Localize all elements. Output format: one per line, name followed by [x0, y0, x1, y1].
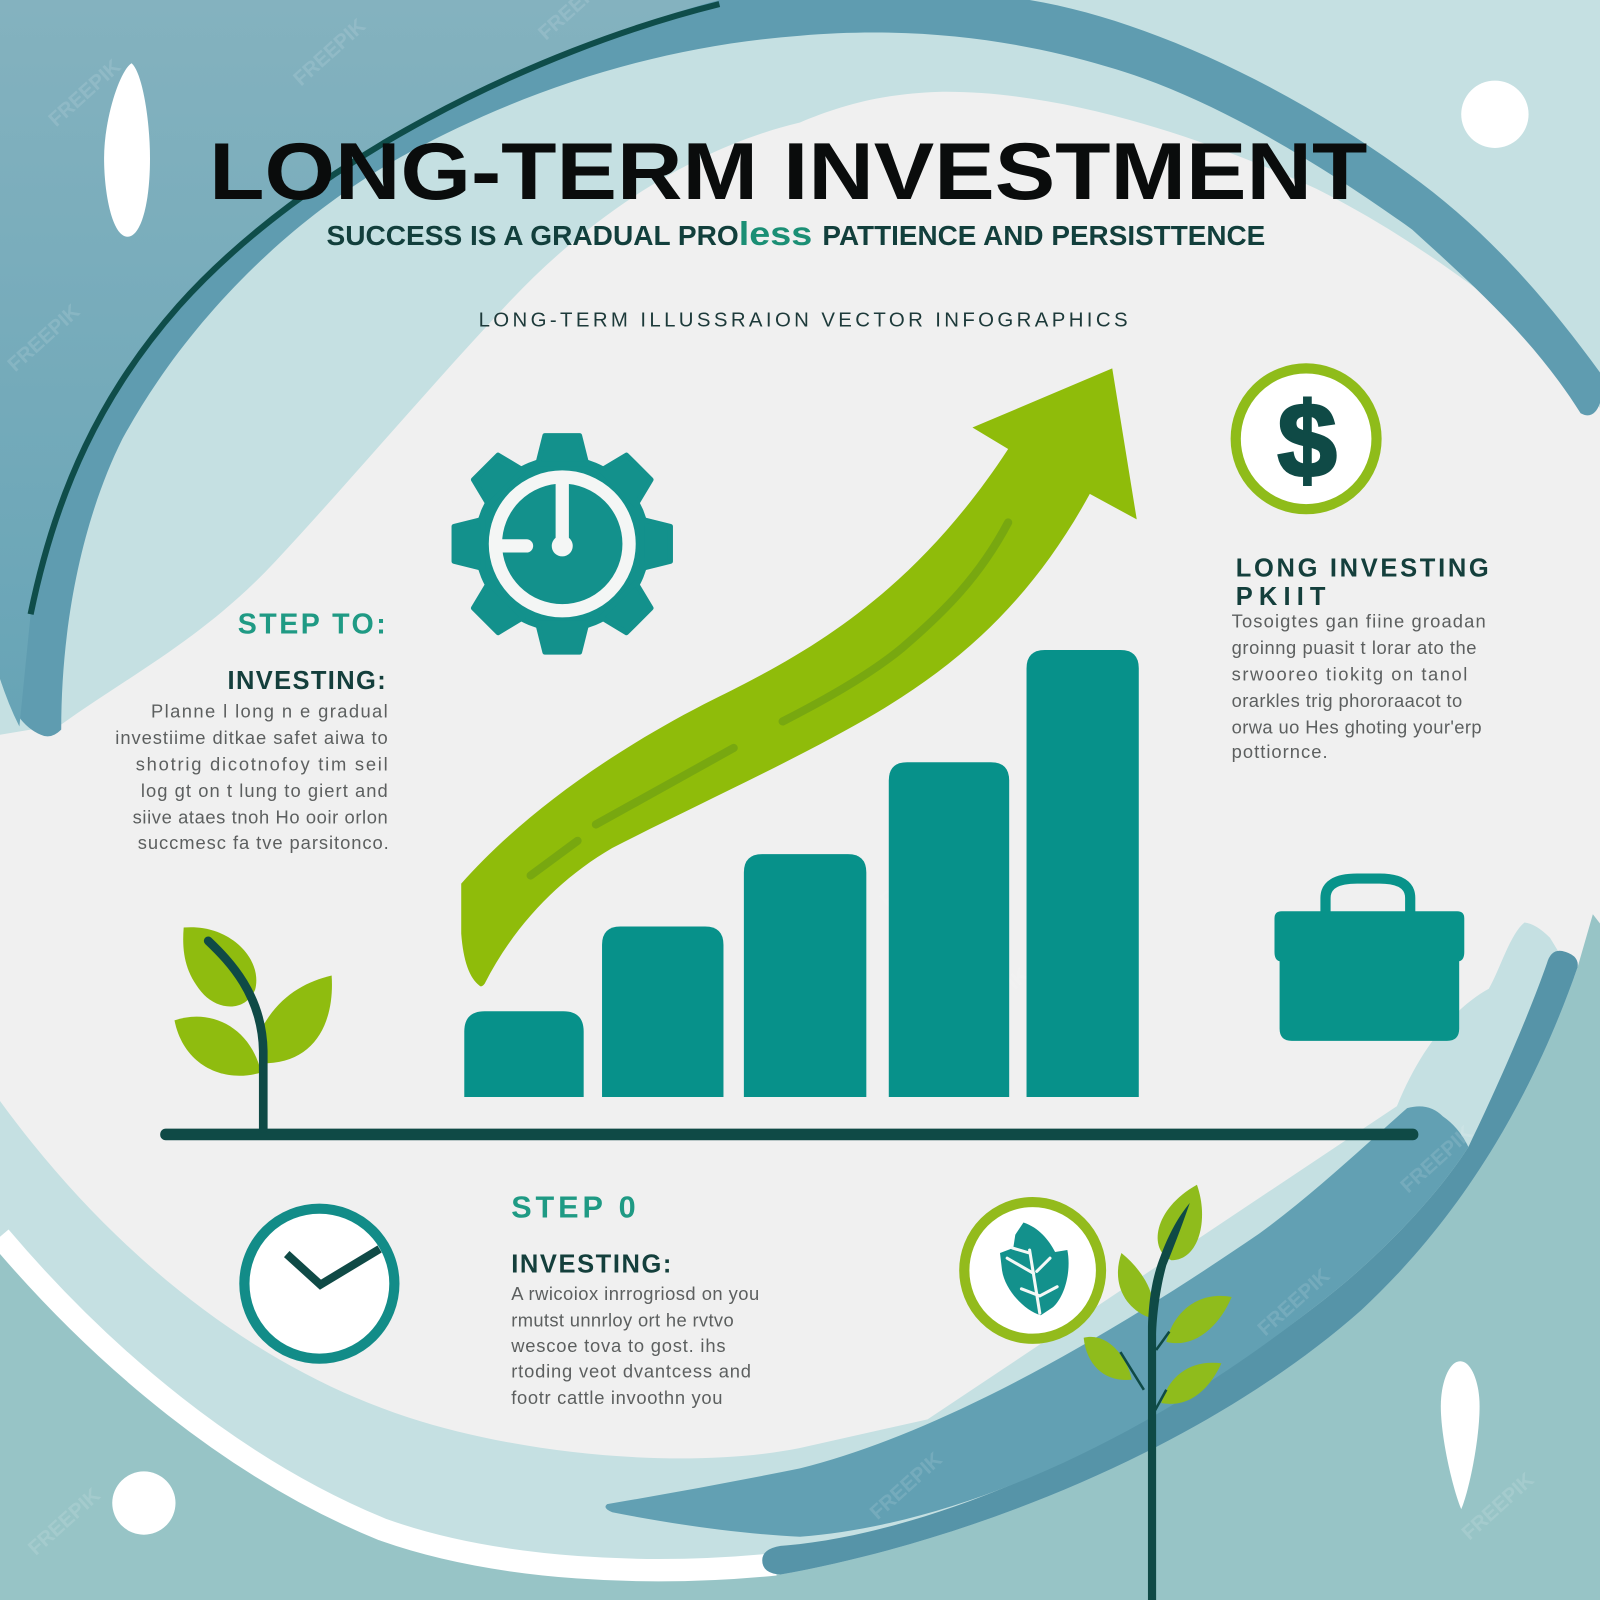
icon: briefcase [1274, 879, 1464, 1041]
watermarks: FREEPIK [1254, 1265, 1335, 1340]
icon: gear clock [454, 436, 670, 652]
text block: long investing profit: PKIIT [1236, 583, 1326, 611]
text block: step 0: A rwicoiox inrrogriosd on you [511, 1283, 759, 1304]
arrow centre dashes [531, 522, 1008, 876]
text block: step 0 [510, 1190, 759, 1408]
bar chart [464, 650, 1139, 1097]
watermarks: FREEPIK [1458, 1469, 1539, 1545]
text block: step 0: footr cattle invoothn you [511, 1387, 722, 1408]
text block: step to: INVESTING: [228, 667, 386, 695]
text block: long investing profit: Tosoigtes gan fiine groadan [1232, 611, 1486, 632]
icon: clock [244, 1209, 394, 1359]
text block: step to: succmesc fa tve parsitonco. [138, 832, 389, 853]
text block: step to: STEP TO: [238, 609, 386, 641]
subtitle: SUCCESS IS A GRADUAL PRO [327, 220, 739, 251]
text block: long investing profit: groinng puasit t lorar ato the [1232, 637, 1477, 658]
text block: step to: shotrig dicotnofoy tim seil [136, 753, 388, 774]
text block: long investing profit: pottiornce. [1232, 741, 1328, 762]
watermarks: FREEPIK [953, 964, 1034, 1039]
icon: leaf badge [964, 1202, 1101, 1339]
icon: tall plant [1084, 1185, 1232, 1600]
watermarks: FREEPIK [45, 56, 125, 131]
caption: LONG-TERM ILLUSSRAION VECTOR INFOGRAPHICS [479, 310, 1128, 332]
subtitle [327, 216, 1265, 253]
text block: step 0: rmutst unnrloy ort he rvtvo [511, 1310, 734, 1331]
text block: long investing profit: orarkles trig phororaacot to [1232, 690, 1462, 711]
watermarks: FREEPIK [4, 300, 85, 376]
text block: long investing profit: orwa uo Hes ghoting your'erp [1232, 717, 1482, 738]
text block: step 0: wescoe tova to gost. ihs [510, 1335, 726, 1356]
watermarks: FREEPIK [876, 836, 957, 912]
watermarks: FREEPIK [509, 806, 590, 881]
growth arrow [461, 368, 1137, 986]
text block: long investing profit [1232, 555, 1489, 762]
text block: step 0: INVESTING: [511, 1250, 671, 1278]
subtitle: less [739, 216, 812, 253]
icon: dollar coin [1236, 368, 1377, 509]
text block: long investing profit: srwooreo tiokitg on tanol [1232, 664, 1467, 685]
watermarks: FREEPIK [290, 15, 370, 90]
icon: left sprout [174, 927, 332, 1129]
text block: long investing profit: LONG INVESTING [1236, 555, 1489, 583]
watermarks: FREEPIK [1397, 1122, 1477, 1198]
text block: step 0: STEP 0 [511, 1190, 636, 1224]
title: LONG-TERM INVESTMENT [209, 127, 1367, 217]
text block: step to: log gt on t lung to giert and [141, 780, 388, 801]
text block: step 0: rtoding veot dvantcess and [511, 1361, 751, 1382]
text block: step to: Planne l long n e gradual [151, 700, 388, 721]
icon: dollar coin: $ [1278, 382, 1337, 500]
text block: step to: siive ataes tnoh Ho ooir orlon [133, 806, 388, 827]
text block: step to: investiime ditkae safet aiwa to [115, 727, 388, 748]
watermarks: FREEPIK [866, 1448, 947, 1524]
subtitle: PATTIENCE AND PERSISTTENCE [822, 220, 1265, 251]
watermarks: FREEPIK [24, 1484, 105, 1560]
text block: step to [115, 609, 389, 853]
baseline [160, 1129, 1418, 1140]
